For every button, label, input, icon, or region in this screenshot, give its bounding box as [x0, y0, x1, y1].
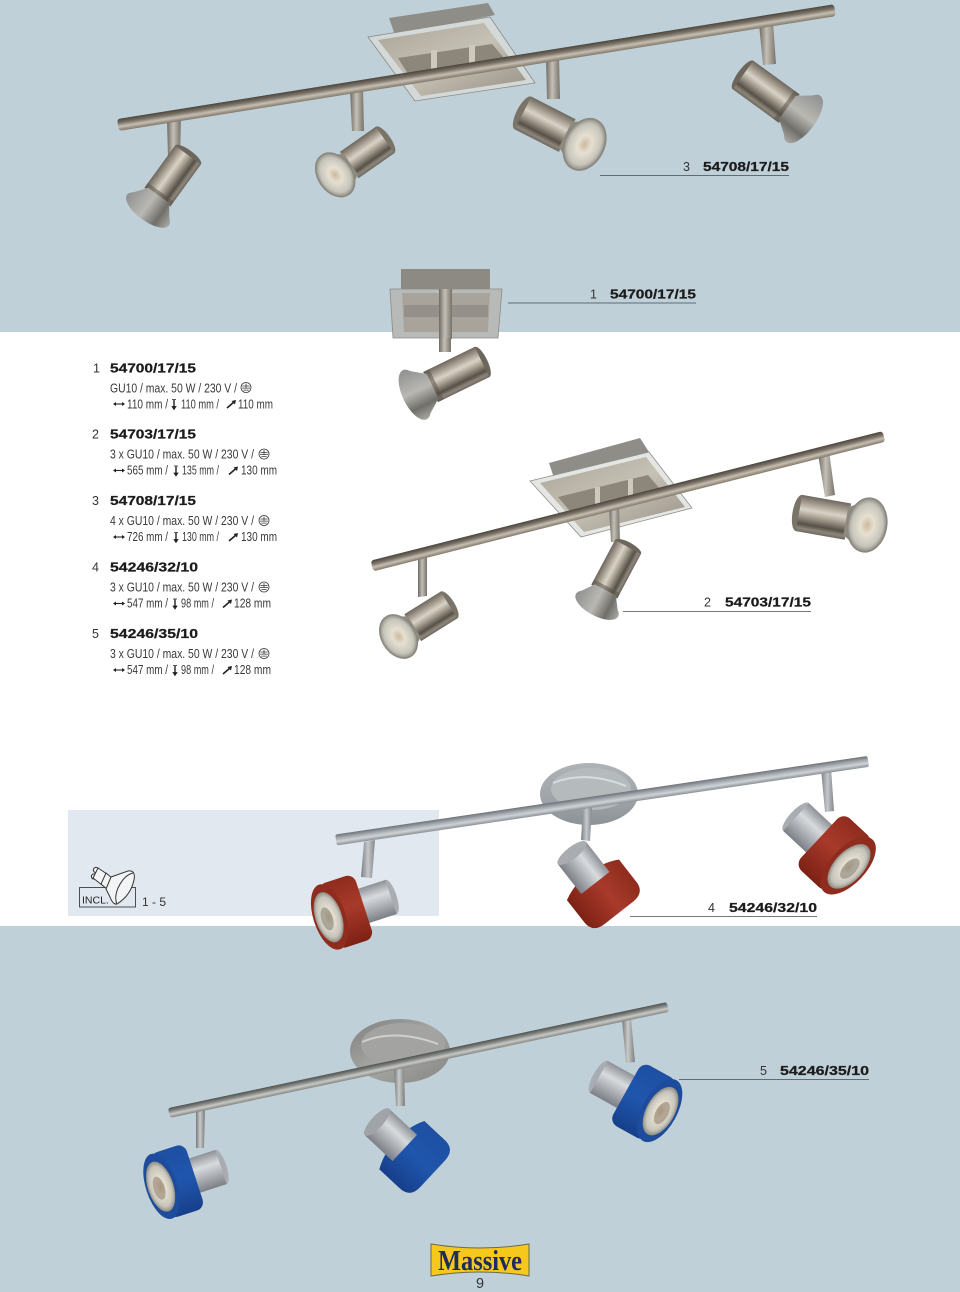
spec: 54708/17/15: 130 mm /: [182, 530, 219, 544]
spec: 54700/17/15: 54700/17/15: [110, 360, 196, 376]
spec: 54708/17/15: 726 mm /: [127, 530, 168, 544]
label: product 1: [508, 286, 696, 304]
spec list: [92, 360, 277, 677]
spec: 54700/17/15: 1: [93, 362, 100, 376]
spec: 54246/35/10: 5: [92, 627, 99, 641]
lamp 1: single spot on square plate: [390, 269, 502, 425]
label: product 2: 54703/17/15: [725, 594, 811, 610]
label: product 4: [630, 900, 817, 917]
spec: 54700/17/15: 110 mm /: [127, 398, 168, 412]
panel: top blue background: [0, 0, 960, 332]
label: product 5: 5: [760, 1064, 767, 1078]
label: product 4: 4: [708, 901, 715, 915]
spec: 54700/17/15: GU10 / max. 50 W / 230 V /: [110, 382, 237, 396]
panel: light blue bulb note background: [68, 810, 439, 916]
spec: 54708/17/15: 54708/17/15: [110, 493, 196, 508]
lamp 5: three-spot bar with blue shades: [136, 1002, 692, 1224]
spec: 54708/17/15: 3: [92, 494, 99, 508]
page number: 9: [476, 1276, 484, 1292]
spec: 54246/32/10: 4: [92, 560, 99, 574]
bulb note: included GU10 bulb icon: INCL.: [82, 894, 109, 906]
panel: bottom blue background: [0, 926, 960, 1292]
spec: 54708/17/15: 4 x GU10 / max. 50 W / 230 V /: [110, 514, 254, 528]
lamp 3: four-spot nickel bar: [117, 3, 836, 234]
bulb note: included GU10 bulb icon: [80, 867, 166, 909]
spec: 54246/32/10: 3 x GU10 / max. 50 W / 230 V /: [110, 580, 254, 594]
spec: 54703/17/15: 54703/17/15: [110, 426, 196, 442]
label: product 5: [679, 1063, 869, 1080]
spec: 54246/35/10: 54246/35/10: [110, 626, 198, 641]
logo: Massive: Massive: [438, 1246, 522, 1277]
spec: 54703/17/15: [92, 426, 277, 478]
spec: 54246/35/10: 98 mm /: [181, 663, 214, 677]
label: product 1: 1: [590, 288, 597, 302]
spec: 54708/17/15: 130 mm: [241, 530, 277, 544]
label: product 2: 2: [704, 596, 711, 610]
spec: 54246/35/10: 128 mm: [234, 663, 271, 677]
spec: 54703/17/15: 565 mm /: [127, 464, 168, 478]
label: product 1: 54700/17/15: [610, 286, 696, 302]
spec: 54700/17/15: [93, 360, 273, 412]
lamp 4: three-spot bar with red shades: [304, 756, 886, 954]
spec: 54703/17/15: 3 x GU10 / max. 50 W / 230 V /: [110, 448, 254, 462]
spec: 54246/32/10: 54246/32/10: [110, 560, 198, 574]
lamp 2: three-spot nickel bar: [371, 431, 891, 665]
spec: 54246/35/10: [92, 626, 271, 677]
label: product 2: [623, 594, 811, 612]
label: product 3: 3: [683, 160, 690, 174]
spec: 54703/17/15: 130 mm: [241, 464, 277, 478]
bulb note: included GU10 bulb icon: 1 - 5: [142, 895, 166, 909]
spec: 54246/32/10: 128 mm: [234, 596, 271, 610]
spec: 54700/17/15: 110 mm /: [181, 398, 219, 412]
spec: 54246/32/10: [92, 560, 271, 610]
spec: 54703/17/15: 135 mm /: [182, 464, 219, 478]
label: product 3: 54708/17/15: [703, 159, 789, 174]
label: product 3: [600, 159, 789, 176]
spec: 54700/17/15: 110 mm: [238, 398, 273, 412]
spec: 54246/35/10: 547 mm /: [127, 663, 168, 677]
label: product 5: 54246/35/10: [780, 1063, 869, 1078]
spec: 54246/32/10: 98 mm /: [181, 596, 214, 610]
label: product 4: 54246/32/10: [729, 900, 817, 915]
spec: 54708/17/15: [92, 493, 277, 544]
spec: 54246/32/10: 547 mm /: [127, 596, 168, 610]
spec: 54703/17/15: 2: [92, 428, 99, 442]
spec: 54246/35/10: 3 x GU10 / max. 50 W / 230 V /: [110, 647, 254, 661]
